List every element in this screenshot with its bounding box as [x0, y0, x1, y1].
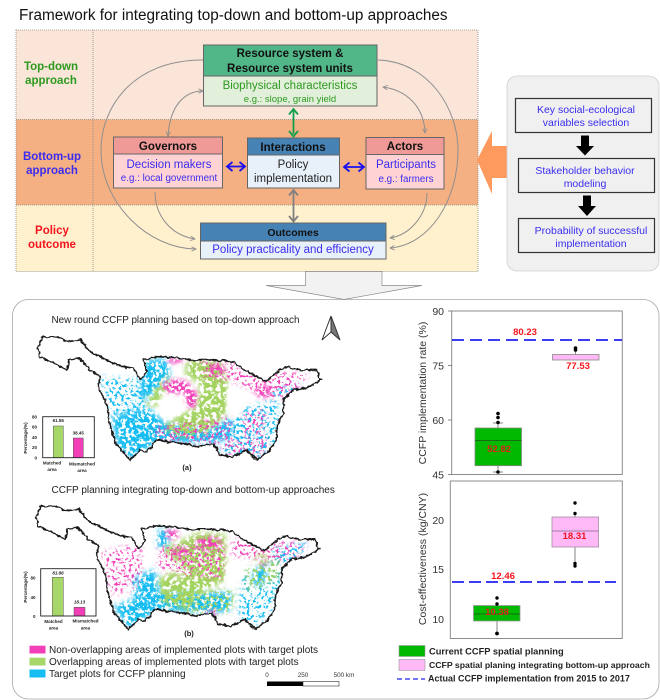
value: actual: 12.46 [491, 571, 515, 582]
inset chart a: area [47, 467, 57, 472]
title: Framework for integrating top-down and bottom-up approaches [19, 7, 448, 24]
inset chart a: 61.55 [53, 418, 64, 423]
map a label: (a) [182, 463, 192, 472]
box: actors: e.g.: farmers [378, 174, 434, 185]
inset chart b: 18.13 [74, 600, 86, 604]
panel: modeling steps [507, 76, 659, 271]
inset chart a: 80 [32, 414, 37, 420]
row: bottom-up band [16, 120, 478, 205]
box: outcomes: Outcomes [267, 227, 319, 239]
map b [37, 506, 319, 629]
legend: target plots: Target plots for CCFP planning [49, 669, 186, 680]
legend: overlapping: Overlapping areas of implemented plots with target plots [49, 657, 299, 668]
inset chart a: area [77, 468, 87, 473]
box: resource system: e.g.: slope, grain yield [244, 94, 336, 105]
box: outcomes [200, 223, 386, 259]
curved connectors [101, 60, 458, 249]
box: governors: Decision makers [126, 159, 212, 171]
map b label: (b) [184, 629, 194, 638]
step: probability: Probability of successful [535, 225, 647, 237]
arrow: orange feed into framework [477, 131, 507, 194]
y-axis ticks: 75 [432, 360, 444, 372]
inset chart a: Percentage(%) [23, 422, 28, 454]
box: current planning: 52.82 [487, 444, 511, 455]
box: integrated planning: 18.31 [563, 531, 587, 542]
row: policy outcome band [16, 205, 478, 272]
scale bar: 500 km [334, 672, 354, 679]
arrow: down one [576, 136, 594, 156]
box: interactions [248, 138, 340, 188]
scale bar [265, 672, 354, 686]
box: governors [114, 137, 222, 188]
arrow: down two [578, 196, 596, 216]
box: interactions: Policy [278, 159, 309, 171]
inset chart b: area [49, 626, 59, 630]
y-axis ticks: 10 [432, 614, 444, 626]
box: governors: e.g.: local government [121, 173, 217, 184]
inset chart a: 38.45 [73, 430, 84, 436]
bar: matched [53, 426, 63, 458]
y-axis ticks: 15 [432, 564, 444, 576]
inset chart b: 0 [33, 614, 36, 619]
arrow: interactions to outcomes [289, 190, 298, 222]
box: actors: Participants [376, 159, 436, 171]
box: resource system: Resource system units [227, 63, 353, 75]
map a [38, 337, 321, 460]
box: resource system: Biophysical characteristics [223, 80, 358, 92]
scale bar: 0 [265, 672, 269, 679]
value: actual: 80.23 [513, 327, 537, 338]
bar: matched [52, 577, 63, 616]
bar: mismatched [74, 607, 85, 616]
chart: implementation rate [417, 306, 622, 482]
label: policy outcome: Policy [35, 225, 70, 237]
label: bottom-up approach: Bottom-up [23, 151, 81, 163]
box: integrated planning: 77.53 [566, 361, 590, 372]
inset chart a: 40 [32, 435, 37, 440]
step: variable selection [516, 98, 652, 132]
y-axis title: Cost-effectiveness (kg/CNY) [417, 493, 429, 625]
box: integrated planning [552, 346, 599, 372]
step: behavior modeling: modeling [564, 178, 606, 190]
panel: results [12, 300, 659, 699]
box: integrated planning [552, 501, 598, 568]
icon: north arrow [322, 316, 340, 340]
reference line [452, 581, 616, 583]
y-axis ticks: 45 [432, 470, 444, 482]
chart: cost-effectiveness [417, 481, 622, 638]
step: behavior modeling: Stakeholder behavior [535, 165, 635, 177]
inset chart a: 20 [32, 445, 37, 450]
map a heading: New round CCFP planning based on top-down approach [52, 315, 299, 326]
box: governors: Governors [139, 141, 197, 153]
inset chart b: Percentage(%) [23, 571, 28, 603]
arrow: governors to interactions [227, 162, 245, 171]
box: current planning [475, 412, 522, 474]
inset chart b: area [81, 626, 91, 630]
legend: non-overlapping: Non-overlapping areas of implemented plots with target plots [49, 645, 318, 656]
y-axis ticks: 20 [432, 515, 444, 527]
inset chart b: Matched [44, 619, 63, 624]
step: variable selection: Key social-ecological [537, 104, 635, 116]
label: top-down approach: approach [25, 75, 77, 87]
box: current planning [474, 596, 520, 635]
inset chart b: 40 [30, 595, 36, 600]
y-axis ticks: 90 [432, 306, 444, 318]
inset chart a: Mismatched [69, 462, 95, 466]
inset chart a: 0 [34, 456, 37, 460]
label: top-down approach: Top-down [24, 61, 78, 73]
label: policy outcome: outcome [28, 239, 76, 251]
box: actors [366, 138, 444, 189]
label: bottom-up approach: approach [26, 165, 78, 177]
reference line [452, 339, 622, 341]
step: behavior modeling [518, 158, 654, 192]
legend: actual implementation: Actual CCFP implementation from 2015 to 2017 [428, 674, 630, 684]
inset chart b: 81.86 [52, 570, 64, 576]
scale bar: 250 [298, 672, 309, 679]
inset chart a: 60 [32, 425, 37, 430]
legend: integrated planning: CCFP spatial planing integrating bottom-up approach [429, 660, 650, 670]
y-axis ticks: 60 [432, 415, 444, 427]
inset chart b: Mismatched [72, 618, 99, 624]
box: interactions: implementation [254, 173, 332, 185]
y-axis title: CCFP implementation rate (%) [417, 322, 429, 464]
panel: framework [16, 30, 478, 272]
map b heading: CCFP planning integrating top-down and bottom-up approaches [52, 485, 335, 496]
arrow: grey down arrow [266, 272, 422, 300]
box: outcomes: Policy practicality and efficiency [212, 244, 374, 256]
box: actors: Actors [387, 141, 423, 153]
chart legend [397, 646, 650, 684]
legend: current planning: Current CCFP spatial planning [429, 646, 564, 656]
box: interactions: Interactions [260, 142, 326, 154]
inset chart b [23, 569, 99, 630]
inset chart a: Matched [43, 460, 61, 466]
step: probability: implementation [555, 238, 627, 250]
row: top-down band [16, 30, 478, 120]
arrow: resource to interactions [289, 109, 298, 136]
box: resource system [204, 45, 377, 106]
bar: mismatched [73, 438, 83, 458]
map legend [30, 645, 318, 680]
inset chart a [23, 414, 95, 473]
arrow: interactions to actors [344, 162, 364, 172]
box: current planning: 10.38 [485, 607, 509, 618]
step: probability [518, 218, 654, 252]
step: variable selection: variables selection [543, 117, 629, 129]
box: resource system: Resource system & [237, 48, 343, 60]
inset chart b: 80 [30, 576, 36, 580]
